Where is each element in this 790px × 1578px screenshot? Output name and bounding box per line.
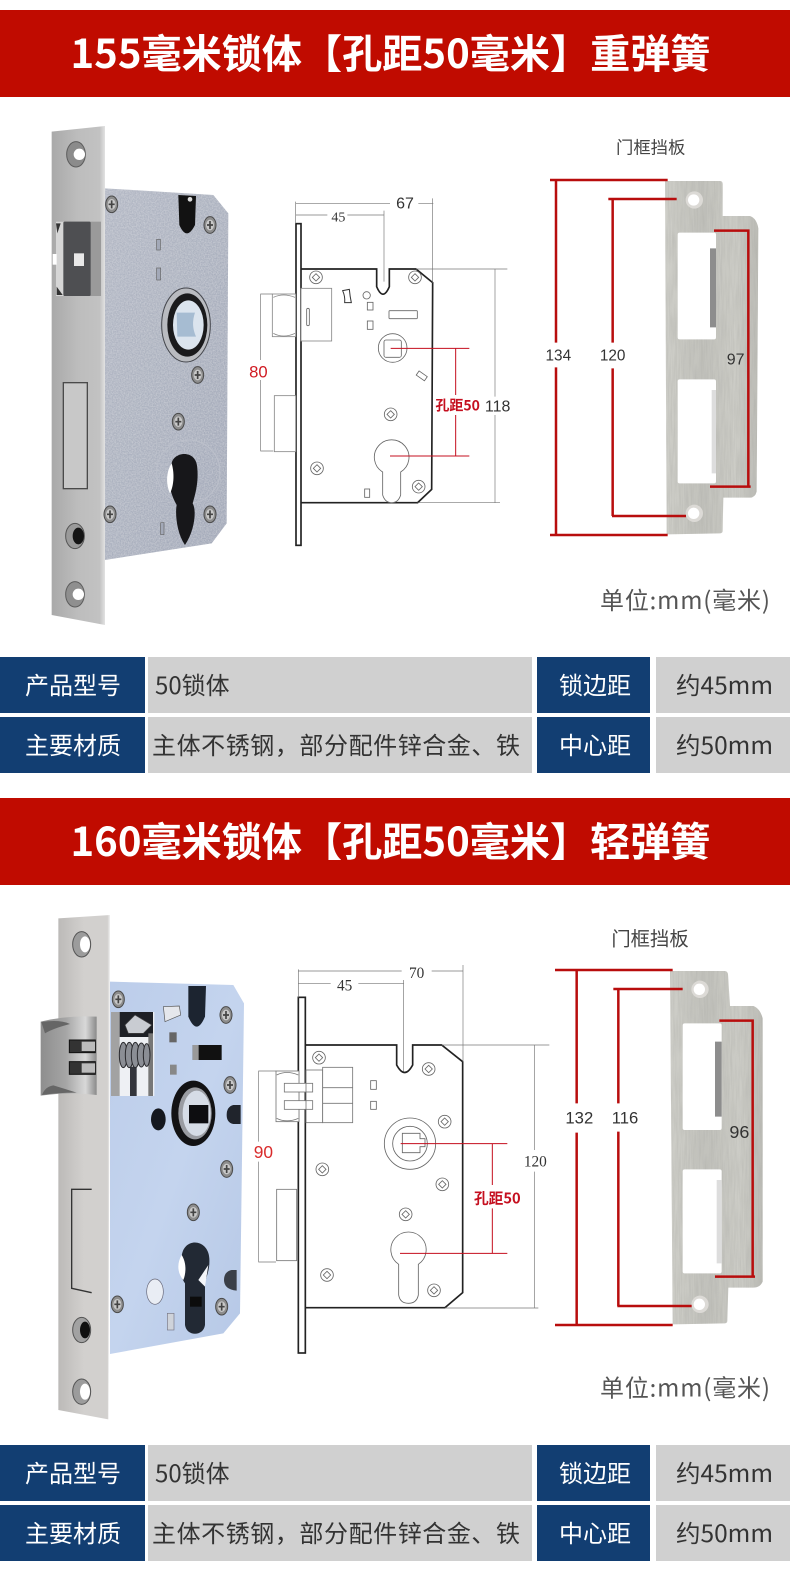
row: model [0, 1445, 790, 1501]
unit note: 单位:mm(毫米) [600, 581, 770, 616]
case [104, 188, 228, 560]
row: material: 主要材质 [25, 726, 121, 761]
dimension hole distance 50 [390, 348, 480, 456]
dimension 118 [416, 269, 511, 503]
latch [41, 1016, 97, 1096]
dimension 67 and 45: 67 [396, 196, 414, 213]
dimension 90 [254, 1071, 276, 1262]
case outline [301, 269, 433, 503]
screws [310, 271, 425, 493]
row: model [0, 657, 790, 713]
photo: 160 lock body [41, 915, 244, 1419]
dimension 120: 120 [524, 1154, 547, 1171]
dimension 132 [555, 970, 673, 1325]
row: material [0, 1505, 790, 1561]
dimension 70 and 45: 45 [337, 978, 353, 995]
row: material [0, 717, 790, 773]
dimension 67 and 45: 45 [331, 211, 345, 226]
spec table: 155 lock [0, 657, 790, 773]
spindle hub [171, 1081, 215, 1146]
latch and bolt outlines [272, 288, 332, 452]
dimension 134: 134 [546, 348, 572, 365]
strike plate shape [665, 181, 758, 534]
dimension 120: 120 [600, 348, 625, 365]
dimension 80: 80 [249, 362, 268, 381]
dimension 97: 97 [727, 352, 745, 369]
header: 155 lock [0, 10, 790, 97]
dimension 118: 118 [485, 398, 511, 415]
deadbolt [63, 383, 87, 489]
header: 160 lock: 160毫米锁体【孔距50毫米】轻弹簧 [70, 810, 711, 868]
row: material: 中心距 [559, 1514, 631, 1549]
dimension 120 [442, 1045, 549, 1308]
dimension 70 and 45 [298, 965, 463, 1072]
spindle hub [162, 288, 210, 362]
strike plate shape [670, 971, 763, 1324]
dimension 134 [546, 180, 668, 535]
dimension 67 and 45 [296, 196, 433, 283]
strike plate: 160 lock [555, 924, 770, 1403]
dimension 116: 116 [612, 1108, 638, 1127]
strike plate: 155 lock [546, 133, 770, 616]
inner details [307, 289, 427, 503]
dimension hole distance 50: 孔距50 [435, 396, 480, 416]
technical drawing: 160 lock [254, 965, 549, 1353]
faceplate [52, 126, 105, 625]
row: model: 产品型号 [25, 1454, 121, 1489]
row: model: 锁边距 [559, 1454, 631, 1489]
dimension 120 [600, 199, 686, 516]
row: material: 主体不锈钢，部分配件锌合金、铁 [152, 1514, 520, 1549]
dimension 97 [710, 231, 751, 487]
photo: 155 lock body [52, 126, 228, 625]
header: 155 lock: 155毫米锁体【孔距50毫米】重弹簧 [70, 22, 711, 80]
row: model: 约45mm [676, 666, 773, 701]
inner details [371, 1081, 436, 1303]
cylinder hole [167, 454, 198, 545]
row: model: 50锁体 [155, 1454, 230, 1489]
faceplate outline [298, 997, 305, 1353]
dimension 116 [612, 989, 692, 1306]
header: 160 lock [0, 798, 790, 885]
dimension hole distance 50: 孔距50 [474, 1188, 521, 1209]
strike plate caption: 门框挡板 [611, 924, 689, 952]
dimension 90: 90 [254, 1142, 273, 1162]
latch window [53, 222, 101, 296]
row: material: 中心距 [559, 726, 631, 761]
spring window [111, 1012, 154, 1096]
case [110, 982, 244, 1354]
dimension 80 [249, 294, 273, 451]
row: material: 主体不锈钢，部分配件锌合金、铁 [152, 726, 520, 761]
row: material: 约50mm [676, 726, 773, 761]
dimension 96 [715, 1021, 755, 1277]
case outline [305, 1045, 463, 1308]
dimension 132: 132 [565, 1108, 593, 1127]
row: model: 产品型号 [25, 666, 121, 701]
dimension 70 and 45: 70 [409, 965, 425, 982]
row: model: 50锁体 [155, 666, 230, 701]
faceplate [58, 915, 110, 1419]
dimension 96: 96 [729, 1122, 749, 1142]
row: material: 主要材质 [25, 1514, 121, 1549]
cylinder hole [178, 1242, 209, 1334]
row: model: 约45mm [676, 1454, 773, 1489]
screws [313, 1051, 451, 1297]
dimension hole distance 50 [400, 1144, 521, 1253]
unit note: 单位:mm(毫米) [600, 1368, 770, 1403]
row: model: 锁边距 [559, 666, 631, 701]
strike plate caption: 门框挡板 [616, 133, 685, 158]
row: material: 约50mm [676, 1514, 773, 1549]
spec table: 160 lock [0, 1445, 790, 1561]
latch and bolt outlines [276, 1067, 353, 1261]
technical drawing: 155 lock [249, 196, 511, 545]
faceplate outline [296, 224, 301, 545]
